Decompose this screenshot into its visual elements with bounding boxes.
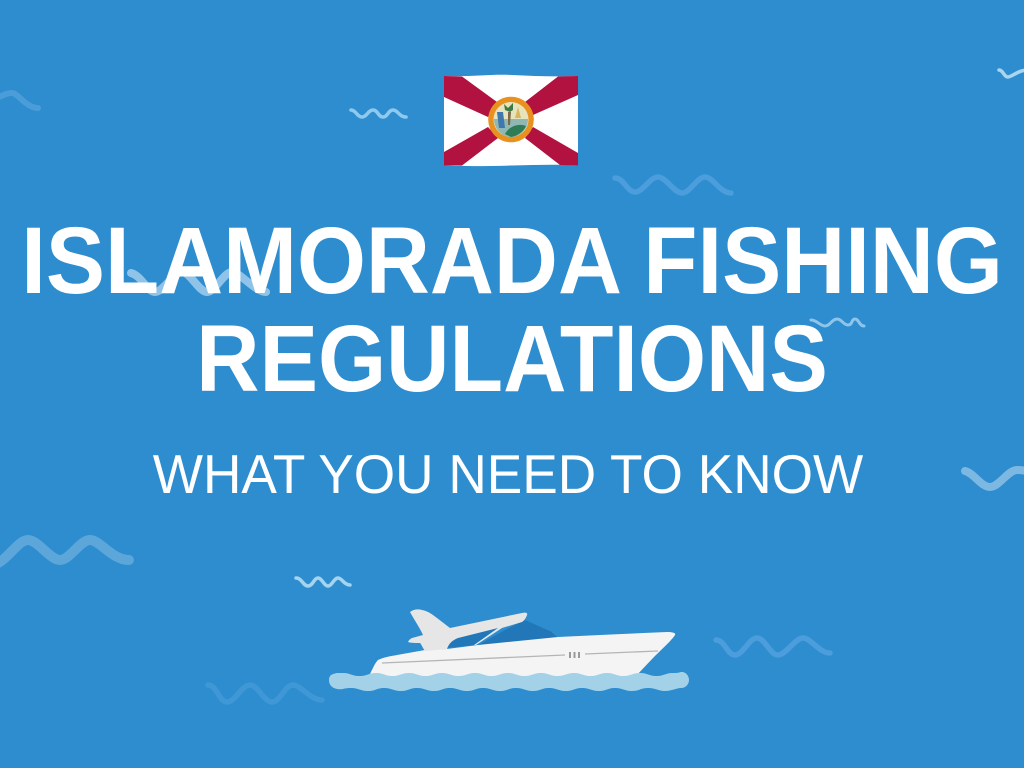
- wave: behind title right: [811, 319, 864, 326]
- boat trim line: [382, 651, 658, 663]
- boat windows: [447, 620, 558, 648]
- title line 1: ISLAMORADA FISHING: [21, 208, 1003, 314]
- title line 2: REGULATIONS: [196, 306, 828, 412]
- flag of Florida: [444, 74, 578, 166]
- boat hull: [370, 632, 675, 678]
- wave: top left: [0, 93, 38, 108]
- flag field: [444, 75, 578, 166]
- wave: top centre small: [351, 110, 406, 117]
- flag seal: [488, 97, 534, 142]
- wave: right edge: [965, 470, 1024, 487]
- wave: behind title left: [131, 272, 266, 292]
- title: [21, 208, 1003, 412]
- flag saltire: [444, 76, 578, 166]
- boat vents: [570, 652, 579, 658]
- wave: lower right: [716, 638, 830, 655]
- boat illustration: [329, 609, 689, 691]
- water: [329, 672, 689, 691]
- boat flybridge fin: [408, 609, 527, 651]
- wave: lower left: [0, 540, 129, 565]
- subtitle: WHAT YOU NEED TO KNOW: [153, 443, 863, 505]
- wave: lower centre small: [296, 578, 350, 586]
- wave: upper centre right: [615, 177, 731, 193]
- wave: top right: [999, 70, 1024, 77]
- wave: bottom left: [208, 685, 322, 702]
